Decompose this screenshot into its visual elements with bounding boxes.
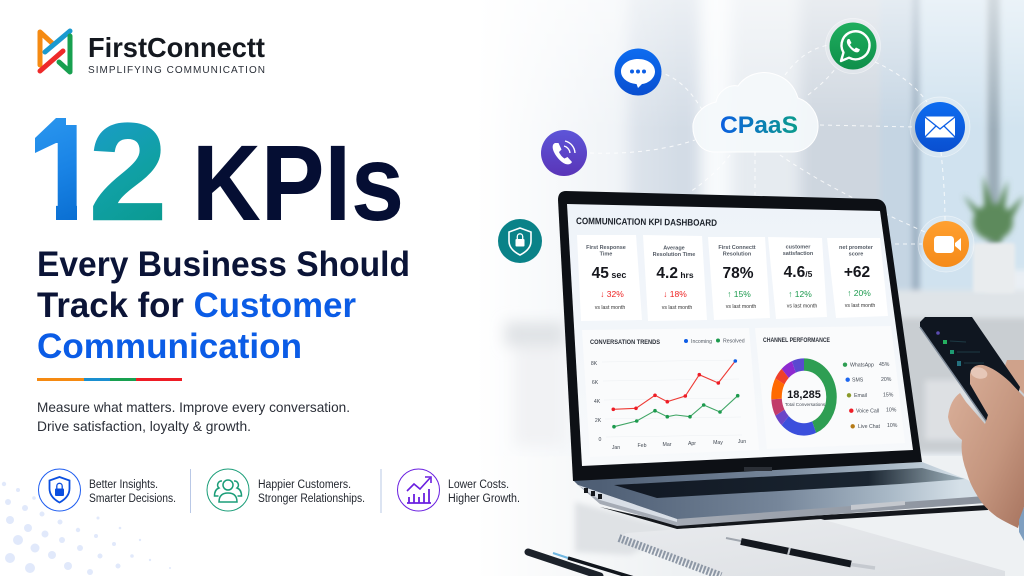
heading: every business should track [37,244,410,366]
notebook spiral [619,538,721,576]
chart axis labels: 8K [591,361,598,367]
logo: FirstConnectt [40,31,265,76]
chart axis labels: Mar [663,442,672,448]
KPI card: net promoter score: vs last month [845,303,875,309]
chart axis labels: Apr [688,441,696,447]
laptop shadow [600,505,988,529]
donut legend: 15% [883,392,894,398]
donut centre total: Total Conversations [785,402,826,407]
notebook [528,519,1005,576]
KPI card: average resolution time: Resolution Time [653,252,695,258]
chart axis labels: Jan [612,445,620,451]
icon: growth chart [398,469,440,511]
heading: every business should track: Track for Customer [37,285,356,325]
chart grid [602,360,742,437]
donut title: CHANNEL PERFORMANCE [763,337,830,344]
icon: security shield [498,219,542,263]
laptop front edge [578,485,986,526]
big headline: 12 KPIs: KPIs [192,122,404,243]
icon: potted plant [963,175,1024,293]
benefit: happier customers [207,469,365,511]
logo wordmark: FirstConnectt [88,32,265,63]
KPI card: first response time: 45 sec [592,265,626,282]
cloud: CPaaS [693,72,818,152]
hand [948,365,1024,528]
icon: shield lock [38,469,80,511]
KPI card: first response time: Time [600,252,612,258]
laptop bezel [558,191,922,481]
keyboard [614,468,965,498]
table reflection [575,502,680,555]
benefit: better insights [38,469,176,511]
shirt cuff [1019,507,1024,541]
dashboard title: COMMUNICATION KPI DASHBOARD [576,216,717,228]
dashboard [576,216,905,457]
pen on notebook [726,538,875,568]
KPI card: average resolution time: Average [663,246,685,252]
laptop ports [584,488,602,499]
icon: logo mark [40,31,70,72]
chart axis labels: 4K [594,399,601,405]
incoming line [613,361,735,409]
benefit text: Higher Growth. [448,493,520,505]
colour rule [37,378,182,381]
chart legend [684,338,745,345]
donut panel: channel performance [755,326,905,449]
dividers [190,469,381,513]
benefit text: Stronger Relationships. [258,493,365,505]
benefit text: Smarter Decisions. [89,493,176,505]
benefit text: Happier Customers. [258,479,351,491]
subheading text: Measure what matters. Improve every conversation. [37,399,350,415]
donut legend: Voice Call [856,408,879,414]
fingers behind phone [1003,360,1024,394]
donut legend: Live Chat [858,424,880,430]
KPI card: first connect resolution: 78% [722,265,754,282]
cloud label: CPaaS [720,112,798,139]
halftone dot pattern [2,482,171,575]
chart axis labels: Jun [738,439,746,445]
KPI card: first connect resolution: First Connectt [718,245,756,251]
KPI card: customer satisfaction: ↑ 12% [788,289,812,299]
subheading text: Drive satisfaction, loyalty & growth. [37,418,251,434]
KPI card: customer satisfaction: satisfaction [783,251,814,257]
icon: people group [207,469,249,511]
logo tagline: SIMPLIFYING COMMUNICATION [88,65,265,76]
icon: email [910,97,970,157]
icon: whatsapp [826,18,880,74]
donut legend: 45% [879,362,890,368]
KPI card: average resolution time [643,235,707,321]
KPI card: net promoter score: +62 [844,264,870,281]
donut legend: 20% [881,377,892,383]
chart legend: Resolved [723,338,745,344]
resolved line [614,396,738,427]
hand holding phone [920,317,1024,541]
icon: voice call [541,130,587,176]
chart title: CONVERSATION TRENDS [590,339,660,346]
big headline: 12 KPIs: 2 [89,96,167,250]
KPI card: average resolution time: 4.2 hrs [656,265,694,282]
KPI card: customer satisfaction: 4.6/5 [784,264,813,281]
laptop screen [567,204,913,466]
KPI card: first connect resolution: Resolution [723,252,752,258]
KPI card: first connect resolution [708,237,770,320]
subheading text [37,399,350,434]
KPI card: first response time: First Response [586,245,626,251]
chart axis labels: Feb [638,443,647,449]
chart axis labels: 6K [592,380,599,386]
left white fade [0,0,680,576]
icon: chat bubble [614,48,662,96]
background shelf bands [505,322,565,446]
donut legend: 10% [887,423,898,429]
KPI card: first response time: ↓ 32% [600,289,624,299]
KPI card: first connect resolution: ↑ 15% [727,289,751,299]
benefit text: Lower Costs. [448,479,509,491]
chart legend: Incoming [691,339,712,345]
chart axis labels: 0 [599,437,602,443]
donut centre total [785,389,826,407]
thumbnail [969,365,989,381]
chart axis labels: May [713,440,723,446]
KPI card: net promoter score: score [849,252,863,258]
benefit: lower costs [398,469,520,511]
donut legend: SMS [852,378,864,384]
heading: every business should track: Communication [37,326,302,366]
KPI card: customer satisfaction: vs last month [787,304,817,310]
donut chart [776,365,832,429]
donut legend [843,362,898,430]
heading: every business should track: Every Business Should [37,244,410,284]
big headline: 12 KPIs [35,118,400,221]
phone [920,317,1020,424]
chart axis labels: 2K [595,418,602,424]
KPI card: average resolution time: ↓ 18% [663,289,687,299]
donut centre total: 18,285 [787,389,821,401]
second pen [528,552,634,576]
KPI card: net promoter score: ↑ 20% [847,288,871,298]
KPI card: customer satisfaction: customer [786,244,811,250]
benefit text: Better Insights. [89,479,158,491]
KPI card: customer satisfaction [768,237,827,319]
KPI card: first response time: vs last month [595,305,625,311]
icon: video camera [918,216,974,272]
donut legend: 10% [886,408,897,414]
KPI card: net promoter score: net promoter [839,245,874,251]
donut legend: WhatsApp [850,362,874,368]
KPI card: average resolution time: vs last month [662,305,692,311]
KPI card: first response time [577,235,642,321]
line chart panel: conversation trends [582,328,759,457]
KPI card: net promoter score [827,238,888,318]
laptop [558,191,988,529]
chart axis labels [591,361,746,451]
KPI card: first connect resolution: vs last month [726,304,756,310]
dashed connectors [590,45,945,244]
laptop deck [573,462,985,523]
donut legend: Email [854,393,867,399]
big headline: 12 KPIs: 1 [26,96,102,250]
